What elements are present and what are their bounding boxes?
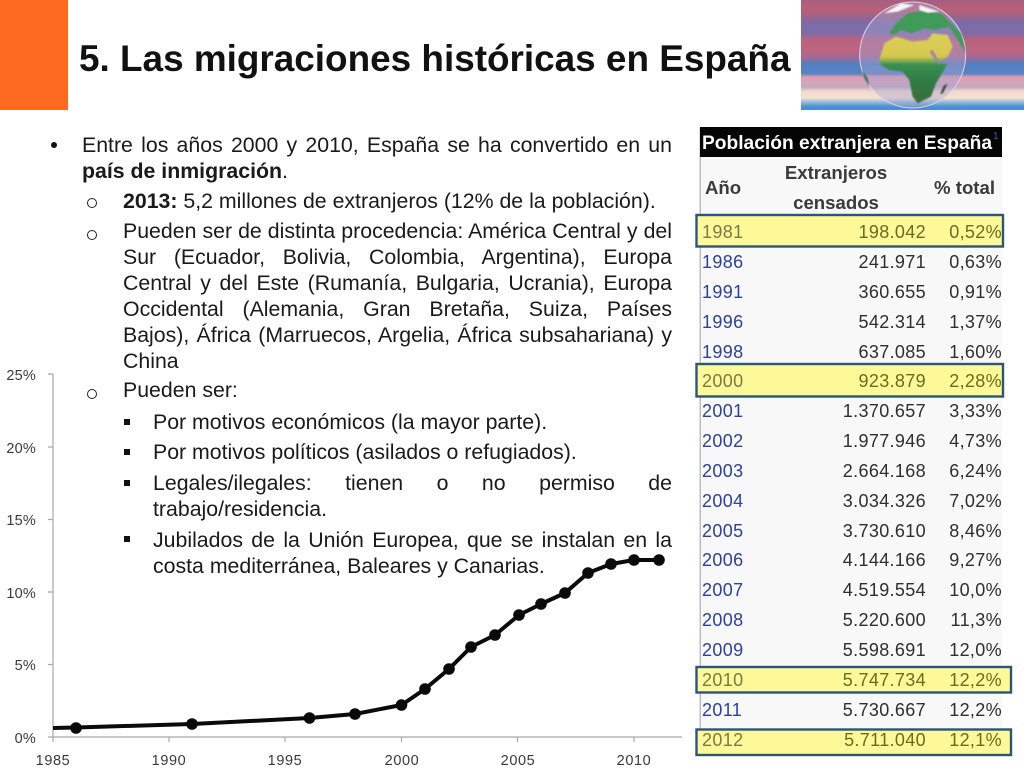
- table rows: 1996: [702, 312, 743, 332]
- table rows: 12,2%: [949, 670, 1002, 690]
- table rows: 2008: [702, 610, 743, 630]
- table rows: [702, 222, 1002, 750]
- table rows: 2004: [702, 491, 743, 511]
- table rows: 2012: [702, 730, 743, 750]
- y axis labels: 5%: [15, 658, 36, 674]
- column headings: Extranjeros: [785, 162, 887, 183]
- table rows: 2,28%: [949, 371, 1002, 391]
- chart axes: [48, 374, 682, 742]
- table rows: 3.034.326: [843, 491, 926, 511]
- body text block: Sur (Ecuador, Bolivia, Colombia, Argentina), Europa: [123, 245, 672, 269]
- table rows: 4.144.166: [843, 550, 926, 570]
- y axis labels: 10%: [6, 586, 36, 602]
- table rows: 542.314: [858, 312, 926, 332]
- body text block: Por motivos políticos (asilados o refugiados).: [153, 440, 577, 464]
- column headings: % total: [934, 177, 995, 198]
- column headings: censados: [793, 192, 879, 213]
- body text block: Jubilados de la Unión Europea, que se instalan en la: [153, 528, 672, 552]
- table rows: 8,46%: [949, 521, 1002, 541]
- table rows: 3,33%: [949, 401, 1002, 421]
- table rows: 1.370.657: [843, 401, 926, 421]
- table rows: 5.598.691: [843, 640, 926, 660]
- table rows: 4.519.554: [843, 580, 926, 600]
- table rows: 1998: [702, 342, 743, 362]
- table rows: 1,60%: [949, 342, 1002, 362]
- orange accent block: [0, 0, 68, 110]
- table rows: 1991: [702, 282, 743, 302]
- table rows: 2001: [702, 401, 743, 421]
- y axis labels: 20%: [6, 441, 36, 457]
- data line and markers: [53, 554, 665, 734]
- table rows: 6,24%: [949, 461, 1002, 481]
- table rows: 0,52%: [949, 222, 1002, 242]
- table rows: 4,73%: [949, 431, 1002, 451]
- highlight frames: [696, 215, 1011, 755]
- table rows: 1,37%: [949, 312, 1002, 332]
- table rows: 10,0%: [949, 580, 1002, 600]
- table rows: 1.977.946: [843, 431, 926, 451]
- table rows: 2007: [702, 580, 743, 600]
- table rows: 12,0%: [949, 640, 1002, 660]
- body text block: 2013: 5,2 millones de extranjeros (12% de la población).: [123, 189, 656, 213]
- body text block: costa mediterránea, Baleares y Canarias.: [153, 554, 545, 578]
- body text block: Pueden ser de distinta procedencia: América Central y del: [123, 219, 672, 243]
- y axis labels: 15%: [6, 513, 36, 529]
- table rows: 637.085: [858, 342, 926, 362]
- table rows: 2002: [702, 431, 743, 451]
- table rows: 923.879: [858, 371, 926, 391]
- main bullet: [51, 142, 57, 148]
- table rows: 241.971: [858, 252, 926, 272]
- y axis labels: 0%: [15, 731, 36, 747]
- table header: Población extranjera en España: [702, 133, 992, 154]
- table rows: 2009: [702, 640, 743, 660]
- table rows: 2003: [702, 461, 743, 481]
- body text block: [51, 133, 672, 578]
- table rows: 2005: [702, 521, 743, 541]
- y axis labels: [6, 368, 36, 747]
- table rows: 1981: [702, 222, 743, 242]
- table rows: 0,63%: [949, 252, 1002, 272]
- table rows: 0,91%: [949, 282, 1002, 302]
- table rows: 9,27%: [949, 550, 1002, 570]
- body text block: China: [123, 349, 179, 373]
- table rows: 2006: [702, 550, 743, 570]
- body text block: trabajo/residencia.: [153, 497, 327, 521]
- table rows: 360.655: [858, 282, 926, 302]
- table rows: 5.747.734: [843, 670, 926, 690]
- body text block: Bajos), África (Marruecos, Argelia, África subsahariana) y: [123, 323, 672, 347]
- body text block: Pueden ser:: [123, 378, 238, 402]
- table rows: 2.664.168: [843, 461, 926, 481]
- highlighted rows: [698, 216, 1010, 755]
- column headings: Año: [705, 177, 741, 198]
- title: 5. Las migraciones históricas en España: [79, 38, 790, 79]
- table rows: 198.042: [858, 222, 926, 242]
- table rows: 2010: [702, 670, 743, 690]
- body text block: Legales/ilegales: tienen o no permiso de: [153, 471, 672, 495]
- table rows: 5.711.040: [844, 730, 926, 750]
- body text block: Por motivos económicos (la mayor parte).: [153, 410, 547, 434]
- table rows: 2000: [702, 371, 743, 391]
- body text block: Central y del Este (Rumanía, Bulgaria, Ucrania), Europa: [123, 271, 672, 295]
- globe banner image: [801, 0, 1024, 110]
- table rows: 5.220.600: [843, 610, 926, 630]
- table rows: 2011: [702, 700, 742, 720]
- table rows: 12,2%: [949, 700, 1002, 720]
- table rows: 7,02%: [949, 491, 1002, 511]
- body text block: país de inmigración.: [82, 159, 288, 183]
- table background: [700, 157, 1002, 755]
- table header: [700, 127, 1002, 157]
- table rows: 5.730.667: [843, 700, 926, 720]
- column headings: [705, 162, 995, 213]
- body text block: Entre los años 2000 y 2010, España se ha convertido en un: [82, 133, 672, 157]
- y axis labels: 25%: [6, 368, 36, 384]
- body text block: Occidental (Alemania, Gran Bretaña, Suiza, Países: [123, 297, 672, 321]
- table header: 1: [993, 131, 999, 142]
- table rows: 1986: [702, 252, 743, 272]
- table rows: 3.730.610: [843, 521, 926, 541]
- table rows: 12,1%: [949, 730, 1002, 750]
- x axis labels: [36, 753, 651, 768]
- table rows: 11,3%: [951, 610, 1002, 630]
